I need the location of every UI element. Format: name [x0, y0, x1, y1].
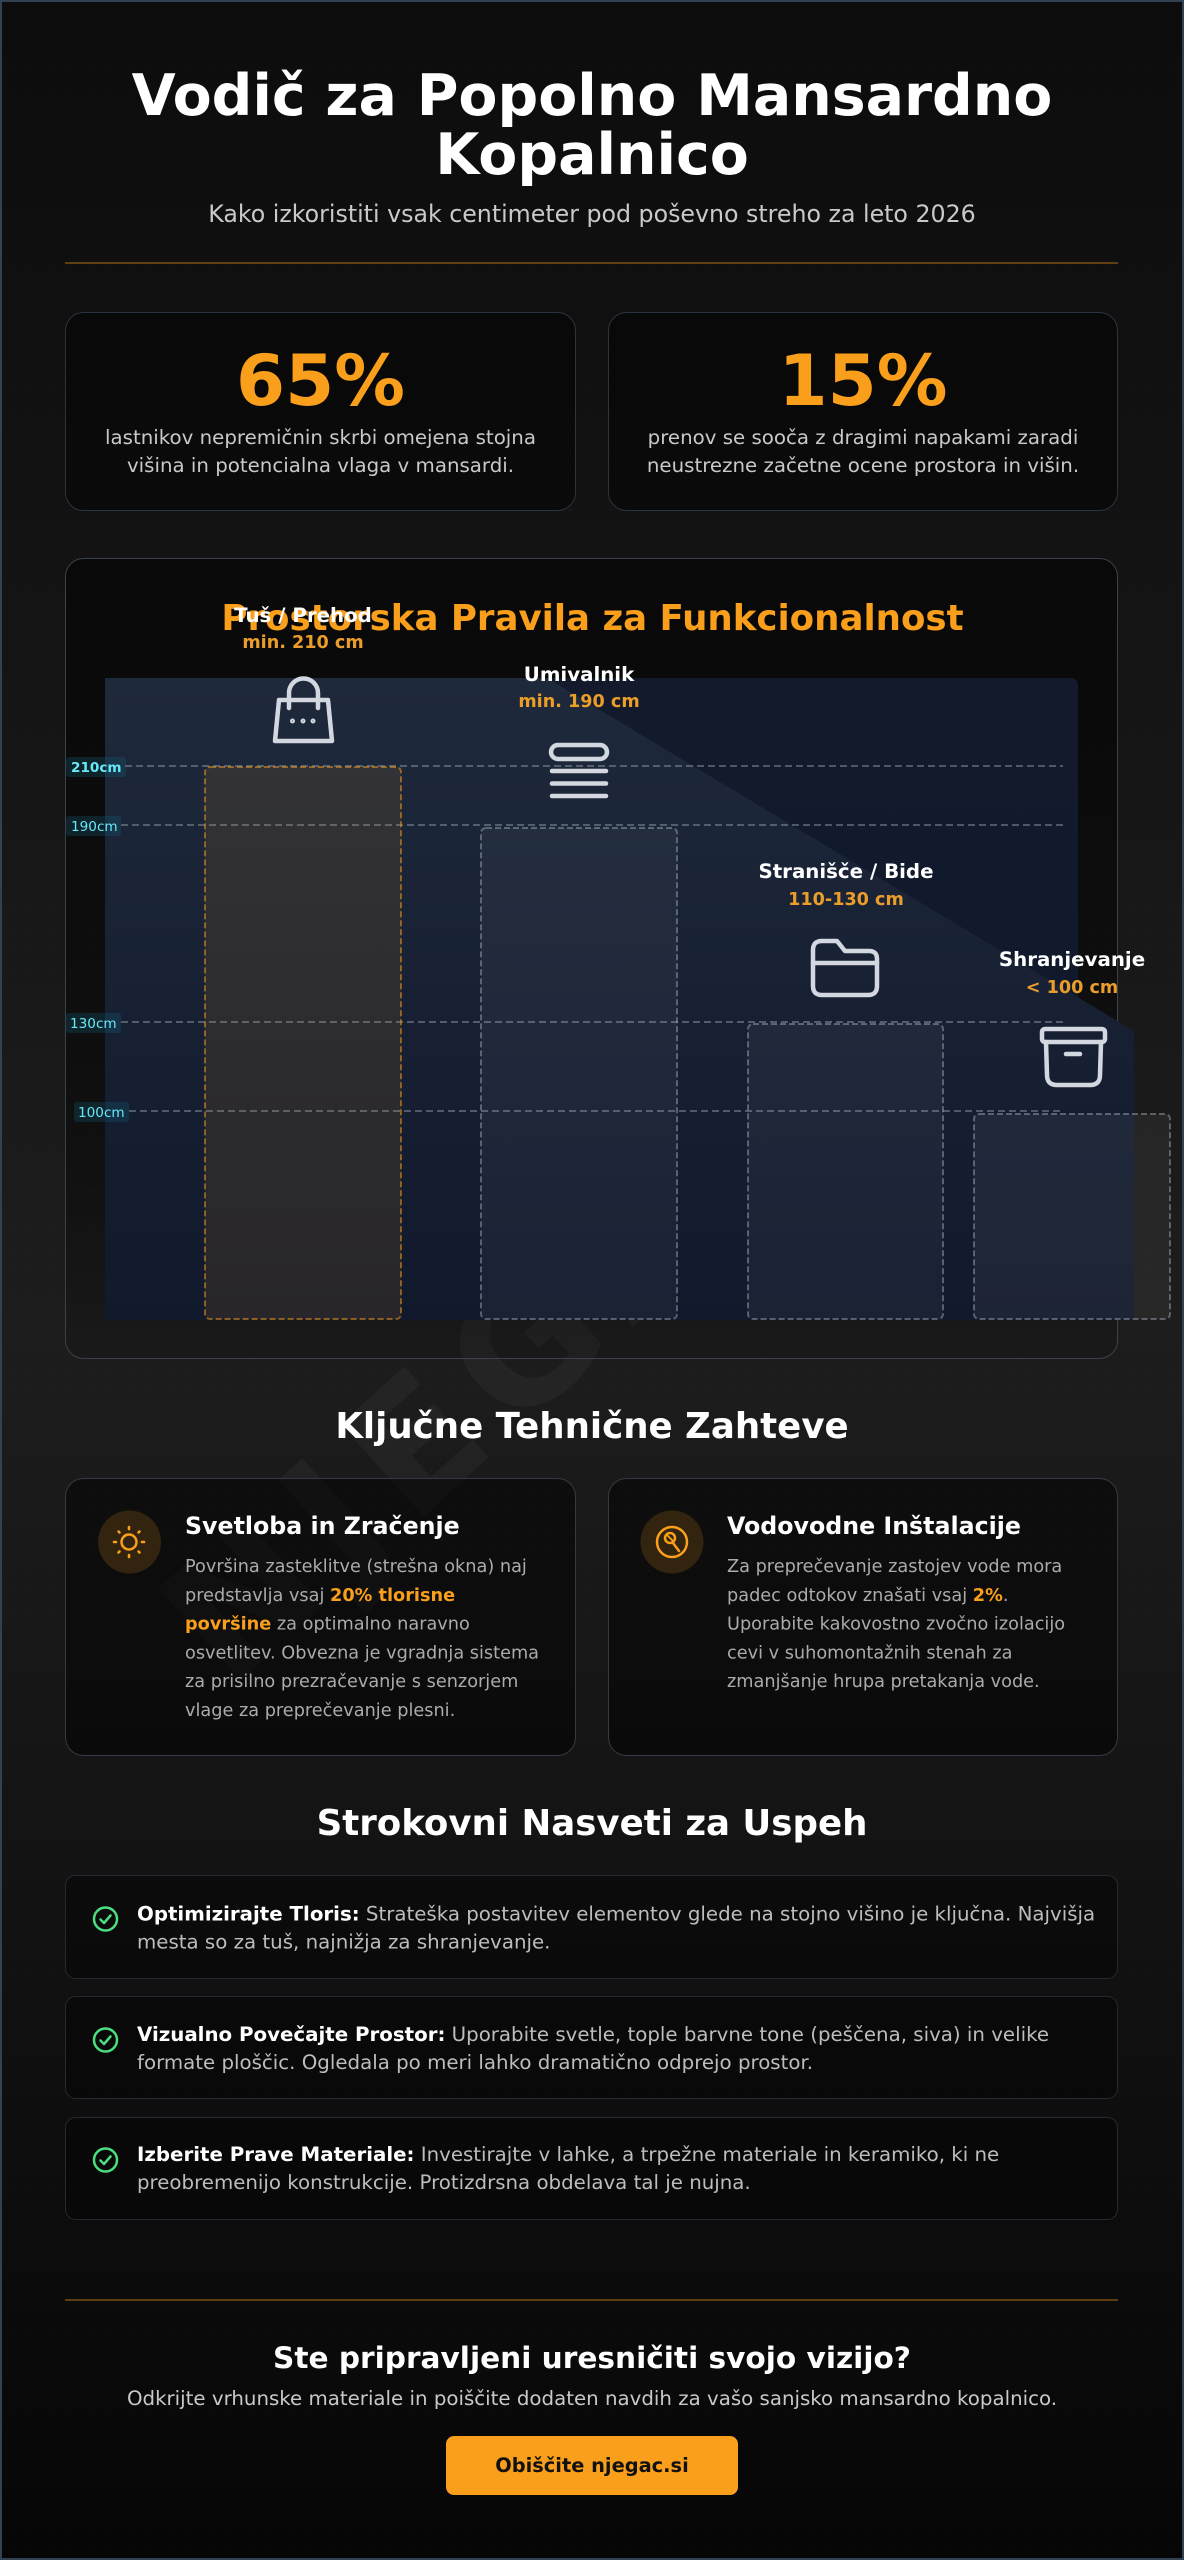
item label: shower — [234, 604, 372, 653]
divider — [65, 262, 1118, 264]
room background — [105, 678, 1134, 1320]
stat text 15% — [647, 426, 1079, 477]
height label 210cm — [66, 757, 126, 777]
item label: toilet — [758, 860, 934, 910]
item label: shower: Tuš / Prehod — [234, 604, 372, 627]
call to action heading: Ste pripravljeni uresničiti svojo vizijo? — [273, 2341, 911, 2375]
card body text: cevi v suhomontažnih stenah za — [727, 1643, 1012, 1663]
card body text: osvetlitev. Obvezna je vgradnja sistema — [185, 1643, 539, 1663]
icon: archive box — [1042, 1029, 1105, 1085]
icon: plumbing — [640, 1510, 704, 1574]
tip text: Optimizirajte Tloris: Strateška postavitev elementov glede na stojno višino je ključna. Najvišja — [137, 1902, 1095, 1926]
tip 3 — [66, 2118, 1118, 2220]
item label: toilet: Stranišče / Bide — [758, 860, 934, 883]
section heading: technical requirements: Ključne Tehnične Zahteve — [335, 1406, 849, 1447]
tip text: preobremenijo konstrukcije. Protizdrsna obdelava tal je nujna. — [137, 2171, 751, 2194]
item label: storage: Shranjevanje — [999, 948, 1145, 971]
height label 190cm: 190cm — [71, 819, 118, 835]
title: Vodič za Popolno Mansardno — [132, 63, 1052, 129]
height guide lines — [121, 766, 1063, 1111]
panel: plumbing — [608, 1478, 1118, 1756]
height label 100cm — [74, 1102, 129, 1122]
height label 100cm: 100cm — [78, 1105, 125, 1121]
stat text 65% — [105, 426, 536, 477]
tip text: formate ploščic. Ogledala po meri lahko dramatično odprejo prostor. — [137, 2051, 813, 2074]
tip 2 — [66, 1996, 1118, 2098]
icon: stack — [551, 745, 607, 796]
stat text 65%: lastnikov nepremičnin skrbi omejena stojna — [105, 426, 536, 449]
card body text: padec odtokov znašati vsaj 2%. — [727, 1586, 1008, 1606]
tip text — [137, 2143, 999, 2194]
card body text: za prisilno prezračevanje s senzorjem — [185, 1672, 518, 1692]
height label 190cm — [66, 816, 121, 836]
tip text: Izberite Prave Materiale: Investirajte v lahke, a trpežne materiale in keramiko, ki ne — [137, 2143, 999, 2166]
card body text: Uporabite kakovostno zvočno izolacijo — [727, 1615, 1065, 1635]
height label 210cm: 210cm — [71, 760, 122, 776]
panel: stat 65% — [66, 312, 576, 510]
tip text — [137, 2023, 1049, 2074]
button — [446, 2436, 738, 2495]
card body text: zmanjšanje hrupa pretakanja vode. — [727, 1672, 1040, 1692]
card body text — [727, 1557, 1065, 1692]
item label: washbasin: Umivalnik — [524, 663, 635, 686]
icon: shopping bag — [275, 678, 332, 741]
icon: check — [94, 1908, 117, 1930]
title: Kopalnico — [435, 122, 749, 188]
section heading: expert tips: Strokovni Nasveti za Uspeh — [317, 1803, 867, 1844]
icon: sun — [98, 1510, 161, 1574]
height label 130cm — [66, 1013, 121, 1033]
panel: light and radiation — [66, 1478, 576, 1756]
tip text: mesta so za tuš, najnižja za shranjevanje. — [137, 1930, 550, 1954]
item label: shower: min. 210 cm — [242, 633, 364, 653]
button: Obiščite njegac.si — [495, 2454, 689, 2477]
stat number 65%: 65% — [236, 339, 405, 422]
item label: washbasin — [518, 663, 640, 712]
card body text: vlage za preprečevanje plesni. — [185, 1701, 455, 1721]
subtitle: Kako izkoristiti vsak centimeter pod poševno streho za leto 2026 — [208, 200, 976, 228]
stat number 15%: 15% — [779, 339, 947, 422]
panel: spatial rules diagram — [66, 558, 1170, 1358]
watermark: NJEGAC.SI — [124, 806, 1110, 1721]
tip text: Vizualno Povečajte Prostor: Uporabite svetle, tople barvne tone (peščena, siva) in velike — [137, 2023, 1049, 2046]
card body text: predstavlja vsaj 20% tlorisne — [185, 1586, 455, 1606]
card title: Vodovodne Inštalacije — [727, 1512, 1021, 1540]
bar: storage — [974, 1114, 1170, 1319]
icon: check — [94, 2148, 117, 2172]
item label: storage — [999, 948, 1145, 998]
card body text: Za preprečevanje zastojev vode mora — [727, 1557, 1062, 1577]
height label 130cm: 130cm — [70, 1016, 117, 1032]
divider — [65, 2299, 1118, 2301]
bar: washbasin — [481, 828, 677, 1319]
item label: toilet: 110-130 cm — [788, 890, 904, 910]
icon: check — [94, 2028, 117, 2052]
panel: stat 15% — [608, 312, 1118, 510]
title — [132, 63, 1052, 188]
stat text 15%: neustrezne začetne ocene prostora in višin. — [647, 454, 1079, 477]
item label: washbasin: min. 190 cm — [518, 692, 640, 712]
tip 1 — [66, 1876, 1118, 1978]
call to action text: Odkrijte vrhunske materiale in poiščite dodaten navdih za vašo sanjsko mansardno kopalnico. — [127, 2387, 1057, 2410]
card body text: površine za optimalno naravno — [185, 1615, 470, 1635]
stat text 65%: višina in potencialna vlaga v mansardi. — [127, 454, 514, 477]
card body text: Površina zasteklitve (strešna okna) naj — [185, 1557, 527, 1577]
tip text — [137, 1902, 1095, 1954]
item label: storage: < 100 cm — [1026, 978, 1118, 998]
card title: Svetloba in Zračenje — [185, 1512, 460, 1540]
bar: toilet — [748, 1024, 943, 1319]
bar: shower — [205, 767, 401, 1319]
stat text 15%: prenov se sooča z dragimi napakami zaradi — [648, 426, 1078, 449]
card body text — [185, 1557, 539, 1721]
diagram heading: Prostorska Pravila za Funkcionalnost — [221, 598, 964, 639]
icon: folder — [813, 941, 877, 995]
